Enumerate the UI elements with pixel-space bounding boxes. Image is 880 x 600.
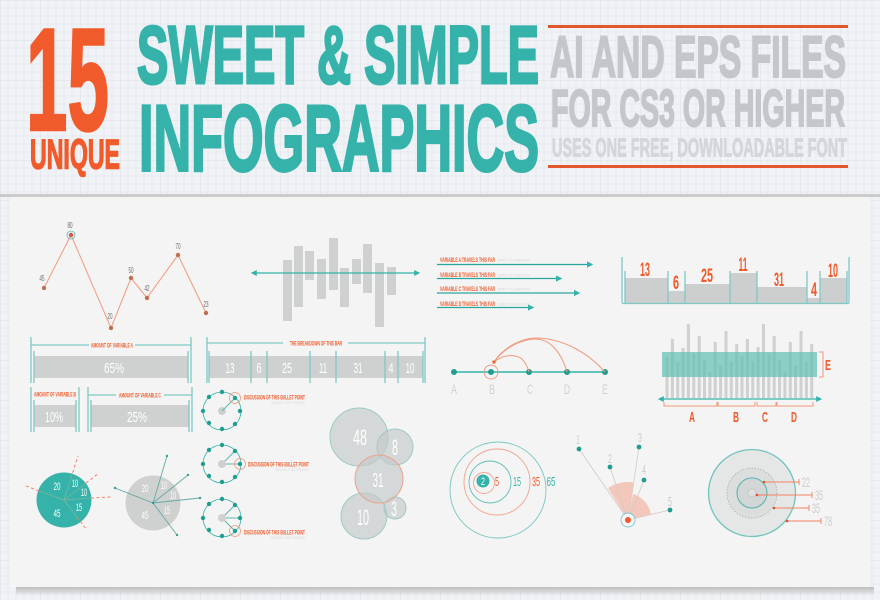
target diagram: 22: [802, 474, 810, 490]
variable arrows: [437, 257, 592, 308]
teal pie: 10: [81, 487, 87, 499]
bubble cluster: 3: [391, 498, 397, 521]
variable arrows: WHAT IT IS GOING NOW: [498, 302, 531, 306]
grey pie: 20: [142, 483, 148, 495]
heading: 15 unique: UNIQUE: [30, 130, 120, 178]
title: [137, 10, 539, 190]
banded bar chart: A: [689, 409, 695, 426]
line chart: [40, 221, 209, 330]
line chart: 23: [204, 300, 209, 309]
bullet wheel 2: [201, 443, 309, 484]
panel: chart sheet: [10, 197, 870, 587]
bullet wheel 1: DISCUSS IT WITH PEOPLE: [271, 401, 305, 405]
grey pie: 10: [170, 490, 176, 502]
title: SWEET & SIMPLE: [137, 10, 539, 101]
line chart: 50: [128, 266, 134, 275]
variable arrows: VARIABLE B TRAVELS THIS FAR: [440, 272, 495, 279]
line chart: 45: [40, 274, 45, 283]
step chart: 6: [673, 273, 679, 294]
concentric circles: 2: [481, 476, 485, 488]
teal pie: 15: [76, 502, 82, 514]
bubble cluster: [330, 408, 413, 539]
banded bar chart: [659, 324, 831, 426]
variable arrows: VARIABLE C TRAVELS THIS FAR: [440, 286, 495, 293]
arc network: A: [451, 381, 457, 397]
concentric circles: 35: [532, 474, 540, 489]
teal pie: 20: [54, 481, 60, 493]
bullet wheel 2: DISCUSSION OF THIS BULLET POINT: [248, 462, 309, 468]
radial dots with wedges: 2: [608, 451, 612, 466]
teal pie: [26, 456, 111, 530]
bar: variable B 10%: [31, 387, 79, 432]
variable arrows: VARIABLE A TRAVELS THIS FAR: [440, 257, 495, 264]
bar: breakdown: 13: [226, 361, 234, 377]
bullet wheel 2: DISCUSS IT WITH PEOPLE: [275, 468, 309, 472]
bar: breakdown: 6: [256, 361, 262, 377]
floating bar chart: [252, 238, 419, 327]
concentric circles: [450, 442, 556, 538]
bar: variable C 25%: [88, 387, 192, 432]
arc network: [451, 338, 608, 397]
heading: 15 unique: [26, 0, 120, 178]
teal pie: 10: [72, 478, 78, 490]
banded bar chart: B: [733, 409, 739, 426]
bar: breakdown: 4: [388, 361, 394, 377]
bubble cluster: 31: [372, 470, 384, 492]
step chart: 11: [738, 255, 748, 276]
bullet wheel 3: [201, 497, 305, 540]
grey pie: 15: [164, 505, 170, 517]
step chart: 4: [811, 280, 817, 301]
bar: variable C 25%: AMOUNT OF VARIABLE C: [119, 392, 161, 400]
grey pie: 45: [142, 510, 148, 522]
heading: 15 unique: 15: [26, 0, 109, 161]
line chart: 20: [108, 312, 113, 321]
target diagram: 35: [815, 487, 823, 503]
bar: variable A 65%: AMOUNT OF VARIABLE A: [91, 342, 133, 350]
banded bar chart: E: [825, 357, 831, 374]
bar: variable A 65%: 65%: [104, 361, 124, 377]
subtitle block: [548, 25, 848, 168]
bar: breakdown: [207, 337, 425, 383]
variable arrows: WHAT IT IS GOING NOW: [498, 288, 531, 292]
line chart: 80: [68, 221, 73, 230]
step chart: 10: [828, 261, 838, 282]
grey pie: [114, 455, 201, 536]
target diagram: 78: [824, 513, 832, 529]
arc network: C: [527, 381, 533, 397]
line chart: 42: [144, 284, 150, 293]
bullet wheel 3: DISCUSSION OF THIS BULLET POINT: [244, 530, 305, 536]
variable arrows: VARIABLE D TRAVELS THIS FAR: [440, 301, 495, 308]
concentric circles: 5: [495, 474, 499, 489]
bar: variable B 10%: AMOUNT OF VARIABLE B: [34, 392, 76, 398]
bar: variable A 65%: [31, 337, 191, 383]
step chart: [622, 255, 849, 304]
bar: breakdown: 11: [319, 361, 327, 377]
bubble cluster: 48: [353, 425, 367, 450]
banded bar chart: D: [791, 409, 797, 426]
line chart: 70: [176, 242, 181, 251]
banded bar chart: C: [762, 409, 768, 426]
concentric circles: 65: [546, 474, 556, 489]
arc network: E: [602, 381, 608, 397]
bar: breakdown: 31: [354, 361, 362, 377]
radial dots with wedges: 5: [668, 494, 672, 509]
radial dots with wedges: [576, 430, 672, 527]
bar: variable B 10%: 10%: [45, 410, 63, 426]
bullet wheel 1: [201, 390, 305, 431]
variable arrows: WHAT IT IS GOING NOW: [498, 274, 531, 278]
bullet wheel 3: DISCUSS IT WITH PEOPLE: [271, 536, 305, 540]
bar: breakdown: 10: [406, 361, 414, 377]
teal pie: 45: [54, 508, 60, 520]
target diagram: 35: [812, 500, 820, 516]
bullet wheel 1: DISCUSSION OF THIS BULLET POINT: [244, 394, 305, 402]
target diagram: [708, 450, 832, 536]
step chart: 31: [774, 270, 784, 291]
title: INFOGRAPHICS: [139, 86, 539, 190]
grey pie: 10: [161, 480, 167, 492]
step chart: 13: [640, 260, 650, 281]
radial dots with wedges: 3: [638, 430, 642, 445]
bubble cluster: 8: [392, 435, 398, 460]
arc network: B: [489, 381, 495, 397]
bar: breakdown: 25: [282, 361, 292, 377]
variable arrows: WHAT IT IS GOING NOW: [498, 258, 531, 262]
step chart: 25: [701, 266, 713, 287]
bubble cluster: 10: [357, 505, 369, 530]
bar: variable C 25%: 25%: [127, 410, 147, 426]
arc network: D: [564, 381, 570, 397]
radial dots with wedges: 4: [642, 462, 646, 477]
concentric circles: 15: [513, 474, 521, 489]
radial dots with wedges: 1: [576, 432, 580, 447]
bar: breakdown: THE BREAKDOWN OF THIS BAR: [290, 340, 342, 348]
